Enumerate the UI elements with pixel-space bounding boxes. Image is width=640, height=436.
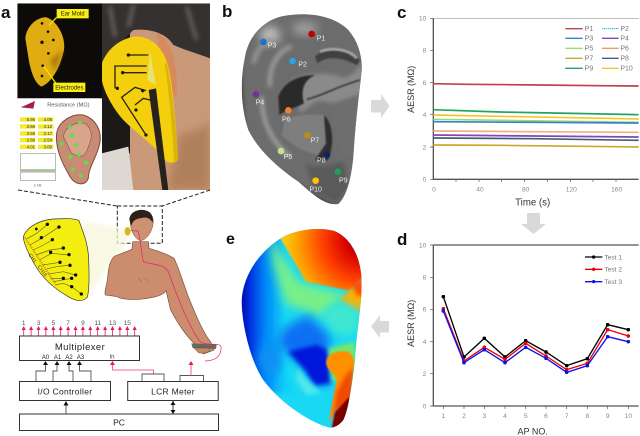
y ticks: 6 (423, 307, 427, 314)
legend: P4 (620, 36, 629, 43)
legend (565, 26, 633, 73)
point labels: P9 (339, 177, 348, 184)
point labels: P3 (268, 43, 276, 50)
photo background (17, 3, 210, 190)
x ticks: 160 (611, 186, 623, 193)
box: I/O controller: I/O Controller (38, 386, 92, 396)
legend: P5 (585, 46, 593, 53)
y ticks: 0 (423, 403, 427, 410)
line: test 2 (443, 309, 628, 370)
x ticks: 3 (482, 413, 486, 420)
block diagram: multiplexer and control (20, 320, 218, 430)
inset: resistance software: 3.00 (44, 144, 53, 149)
inset: resistance software: 3.55 (27, 131, 36, 136)
legend: P9 (585, 66, 593, 73)
inset: resistance software: 2.66 (27, 138, 36, 143)
panel label d: d (397, 230, 407, 249)
channel numbers: 9 (81, 320, 85, 327)
y ticks: 10 (419, 242, 427, 249)
channel numbers: 7 (66, 320, 70, 327)
y ticks: 2 (423, 371, 427, 378)
box: LCR meter (128, 382, 218, 400)
inset: resistance software: Resistance (MΩ) (47, 103, 90, 109)
legend: Test 2 (604, 267, 622, 274)
data lines (433, 84, 639, 147)
channel numbers: 1 (22, 320, 26, 327)
chart d: AESR per acupuncture point (406, 242, 639, 436)
panel label c: c (397, 3, 406, 22)
legend: Test 1 (604, 254, 622, 261)
legend: P7 (585, 56, 593, 63)
arrow: d to e (371, 315, 389, 338)
inset: resistance software: 4.06 (44, 117, 53, 122)
inset: resistance software: 4.12 (44, 124, 53, 129)
channel numbers: 3 (37, 320, 41, 327)
inset: resistance software: 1 Hz (34, 183, 42, 187)
legend: P2 (620, 26, 629, 33)
x ticks: 10 (625, 413, 632, 420)
point labels: P6 (282, 117, 291, 124)
line: test 1 (443, 297, 628, 366)
channel numbers: 5 (51, 320, 55, 327)
ear surface (242, 14, 362, 204)
acupuncture points (253, 31, 341, 184)
box: multiplexer: A1 (54, 355, 62, 361)
box: PC (20, 414, 218, 430)
panel label e: e (226, 231, 235, 248)
y ticks: 8 (423, 48, 427, 55)
y ticks (419, 242, 427, 410)
x ticks: 40 (476, 186, 484, 193)
legend: P3 (585, 36, 593, 43)
y ticks: 4 (423, 112, 427, 119)
box: I/O controller (20, 382, 110, 400)
point labels: P5 (284, 154, 292, 161)
illustration: human torso with cable (105, 210, 221, 361)
legend: P6 (620, 46, 629, 53)
axes (430, 18, 639, 182)
x ticks: 120 (566, 186, 577, 193)
x ticks: 0 (432, 186, 436, 193)
point labels: P8 (317, 158, 326, 165)
inset: resistance software: 5.95 (27, 117, 36, 122)
point labels: P7 (311, 138, 319, 145)
inset: ear mold with electrodes (17, 3, 102, 98)
arrow: c to d (521, 213, 546, 234)
channel numbers: 13 (109, 320, 116, 327)
box: multiplexer: In (109, 354, 115, 360)
chart c: AESR versus time (406, 16, 639, 208)
box: multiplexer: Multiplexer (55, 342, 105, 353)
x ticks (441, 413, 632, 420)
axes (430, 245, 639, 409)
illustration: ear mold electrode map (23, 219, 128, 301)
channel numbers: 15 (124, 320, 131, 327)
arrow: b to c (371, 94, 390, 118)
axis titles: AESR (MΩ) (406, 66, 416, 113)
point labels: P10 (309, 187, 322, 194)
multiplexer outputs (22, 326, 137, 336)
point labels: P2 (298, 61, 307, 68)
y ticks: 2 (423, 144, 427, 151)
inset: resistance software (17, 98, 102, 190)
panel label a: a (1, 3, 11, 22)
legend: P10 (620, 66, 633, 73)
box: multiplexer: A3 (77, 355, 85, 361)
panel b: 3D ear with acupuncture points (242, 14, 362, 204)
x ticks: 4 (503, 413, 507, 420)
label: electrodes: Electrodes (55, 85, 83, 91)
x ticks: 1 (441, 413, 445, 420)
x ticks: 8 (585, 413, 589, 420)
legend: Test 3 (604, 279, 622, 286)
point labels (256, 36, 348, 194)
dashed zoom lines and head box (18, 190, 210, 243)
channel numbers: 11 (94, 320, 101, 327)
x ticks: 80 (522, 186, 530, 193)
arrowheads (43, 361, 176, 414)
inset: resistance software: 3.56 (27, 124, 36, 129)
legend: P1 (585, 26, 593, 33)
y ticks: 0 (423, 177, 427, 184)
legend (585, 254, 622, 286)
LCR to multiplexer links (112, 363, 191, 376)
panel e: resistance heat map on ear (242, 229, 362, 428)
box: multiplexer (20, 336, 140, 361)
inset: resistance software: 2.17 (44, 131, 53, 136)
box: multiplexer: A2 (65, 355, 73, 361)
point labels: P4 (256, 99, 264, 106)
inset: resistance software: 2.54 (44, 138, 53, 143)
y ticks: 4 (423, 339, 427, 346)
illustration: ear mold electrode map: CH16 (36, 264, 48, 278)
y ticks: 10 (419, 16, 427, 23)
legend: P8 (620, 56, 629, 63)
box: PC: PC (113, 418, 125, 428)
x ticks: 2 (462, 413, 466, 420)
line: test 3 (443, 311, 628, 372)
chart c: AESR versus time: Time (s) (515, 197, 550, 208)
illustration: ear mold electrode map: CH1 (27, 253, 38, 264)
inset: resistance software: 4.01 (27, 144, 36, 149)
axis titles: AESR (MΩ) (406, 300, 416, 347)
x ticks: 6 (544, 413, 548, 420)
label: ear mold: Ear Mold (61, 12, 85, 18)
x ticks: 9 (606, 413, 610, 420)
yellow ear mold worn on the ear (101, 37, 178, 190)
box: LCR meter: LCR Meter (151, 386, 195, 396)
x ticks: 5 (524, 413, 528, 420)
control wiring (36, 363, 204, 414)
y ticks (419, 16, 427, 184)
y ticks: 6 (423, 80, 427, 87)
x ticks: 7 (565, 413, 569, 420)
box: multiplexer: A0 (42, 355, 50, 361)
y ticks: 8 (423, 275, 427, 282)
point labels: P1 (317, 36, 325, 43)
panel label b: b (222, 2, 232, 21)
channel numbers (22, 320, 131, 327)
panel a: ear mold photo (17, 3, 210, 190)
x ticks (432, 186, 623, 193)
